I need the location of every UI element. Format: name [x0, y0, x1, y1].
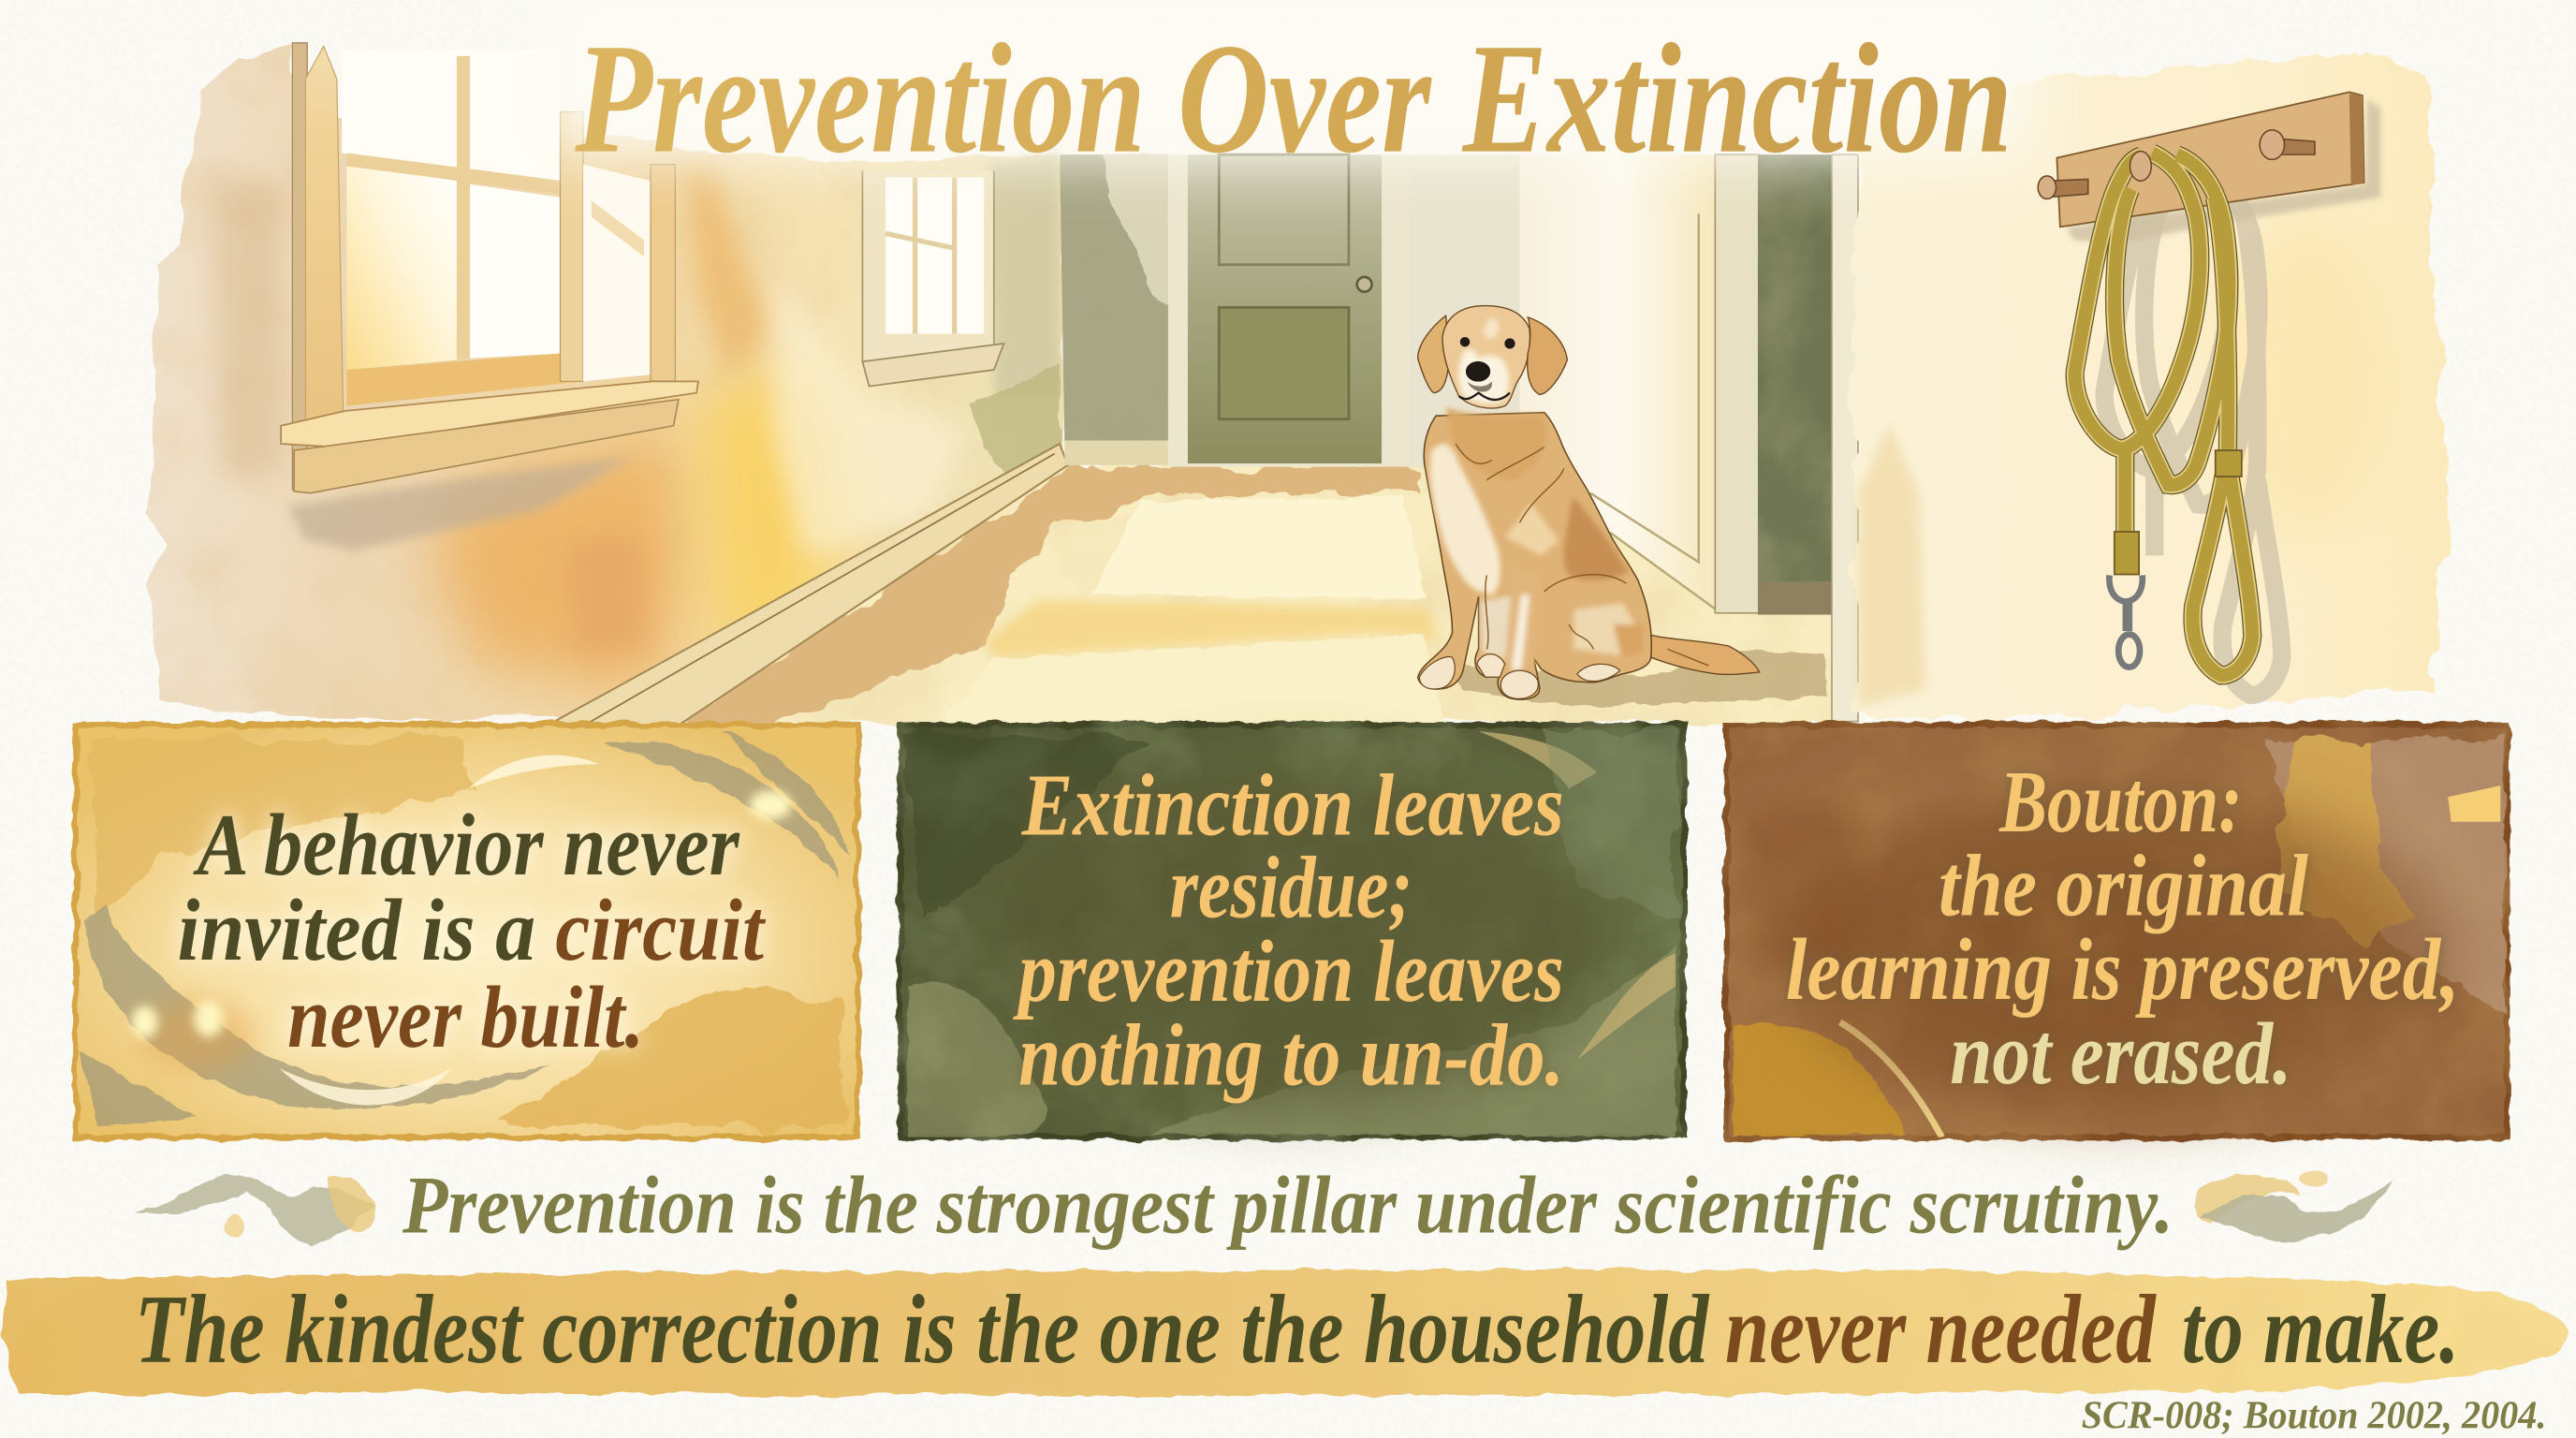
banner brush stroke	[4, 1269, 2569, 1396]
golden retriever	[1418, 306, 1760, 699]
illustration: sunlit hallway	[144, 0, 2448, 726]
panel 1 quote text	[178, 797, 766, 1066]
panel 1 quote text: never built.	[287, 969, 644, 1066]
dog chest fur	[1430, 444, 1500, 595]
banner message: The kindest correction is the one the household	[135, 1274, 1709, 1384]
panel 2 background wash	[900, 725, 1684, 1137]
rack shadow	[2067, 98, 2380, 243]
centre peg head	[2130, 152, 2151, 181]
far wall panel	[1060, 154, 1190, 465]
panel: extinction leaves residue	[900, 725, 1684, 1137]
dog coat markings	[1430, 407, 1643, 670]
panel 2 swirl decorations	[907, 731, 1676, 1137]
tan floor wedge	[674, 467, 1423, 726]
panel 2 quote text: nothing to un-do.	[1018, 1007, 1564, 1105]
panel 2 quote text: residue;	[1170, 839, 1412, 936]
panel 3 background wash	[1727, 725, 2507, 1137]
flourish left	[135, 1175, 374, 1246]
sunlight patch on floor	[1092, 496, 1426, 598]
dog flank	[1564, 496, 1628, 580]
panel 1 quote text: circuit	[555, 882, 766, 979]
panel 1 brush decorations	[79, 731, 848, 1125]
panel 3 quote text	[1786, 754, 2459, 1103]
panel 1 quote text: A behavior never	[193, 797, 740, 894]
title: Prevention Over Extinction	[574, 12, 2012, 186]
pegs	[2038, 130, 2315, 199]
dog neck mane	[1445, 407, 1546, 480]
panel 2 quote text: Extinction leaves	[1021, 757, 1564, 855]
panel 3 quote text: Bouton:	[1998, 754, 2243, 851]
warm streaks on wall	[211, 152, 1060, 690]
dark green doorway	[1758, 154, 1858, 722]
panel 3 quote text: learning is preserved,	[1786, 921, 2459, 1019]
panel 1 background wash	[76, 725, 857, 1137]
yellow band on floor	[986, 600, 1438, 657]
door with frame	[1168, 154, 1408, 467]
dog belly	[1480, 594, 1515, 661]
pale floor foreground	[940, 635, 1445, 726]
dog fur strokes	[1456, 444, 1708, 666]
left wall watercolor wash	[144, 46, 1064, 716]
panel 3 quote text: the original	[1939, 838, 2308, 935]
strap keepers	[2115, 450, 2242, 575]
panel 2 quote text: prevention leaves	[1013, 923, 1564, 1020]
banner message: never needed	[1725, 1274, 2157, 1384]
shadow on right wall	[1858, 424, 1925, 707]
dog body	[1418, 413, 1651, 699]
panel 2 text shade	[979, 764, 1603, 1109]
dog tail	[1645, 633, 1760, 674]
dog head	[1442, 306, 1530, 408]
source citation: SCR-008; Bouton 2002, 2004.	[2082, 1393, 2546, 1437]
window, small	[862, 171, 1003, 387]
dog ears	[1418, 315, 1448, 393]
leash strap	[2075, 153, 2252, 675]
dog paws	[1419, 654, 1620, 698]
flourish right	[2196, 1170, 2392, 1243]
window, large	[281, 43, 698, 493]
banner	[4, 1269, 2569, 1396]
dog forehead and muzzle	[1458, 318, 1509, 404]
metal snap clip	[2109, 575, 2143, 668]
dog haunch	[1573, 603, 1640, 655]
right wall wash	[1856, 52, 2448, 723]
panel: behavior never invited	[76, 725, 857, 1137]
banner message: to make.	[2182, 1274, 2459, 1384]
wooden rack	[2056, 92, 2364, 227]
panel 1 quote text: invited is a	[178, 882, 535, 979]
floor shadow under dog	[1445, 651, 1827, 707]
statement line: Prevention is the strongest pillar under scientific scrutiny.	[402, 1159, 2174, 1250]
wall hook rack with leash	[2038, 92, 2380, 696]
panel 3 gold decorations	[1734, 740, 2506, 1137]
panel 2 quote text	[1013, 757, 1564, 1105]
dog shoulder highlight	[1505, 503, 1559, 555]
dog front leg	[1505, 565, 1541, 666]
dog mouth	[1459, 381, 1510, 400]
title fade glow	[550, 0, 2029, 154]
floor	[657, 463, 1848, 726]
side wall and frames	[1408, 154, 1760, 613]
panel 3 quote text: not erased.	[1950, 1005, 2291, 1103]
baseboard	[546, 444, 1068, 726]
panel: Bouton original learning	[1727, 725, 2507, 1137]
leash shadow	[2104, 172, 2282, 696]
warm glow on right wall	[2210, 213, 2391, 542]
dog eyes and nose	[1460, 337, 1515, 382]
panel 3 text shade	[1791, 789, 2448, 1118]
